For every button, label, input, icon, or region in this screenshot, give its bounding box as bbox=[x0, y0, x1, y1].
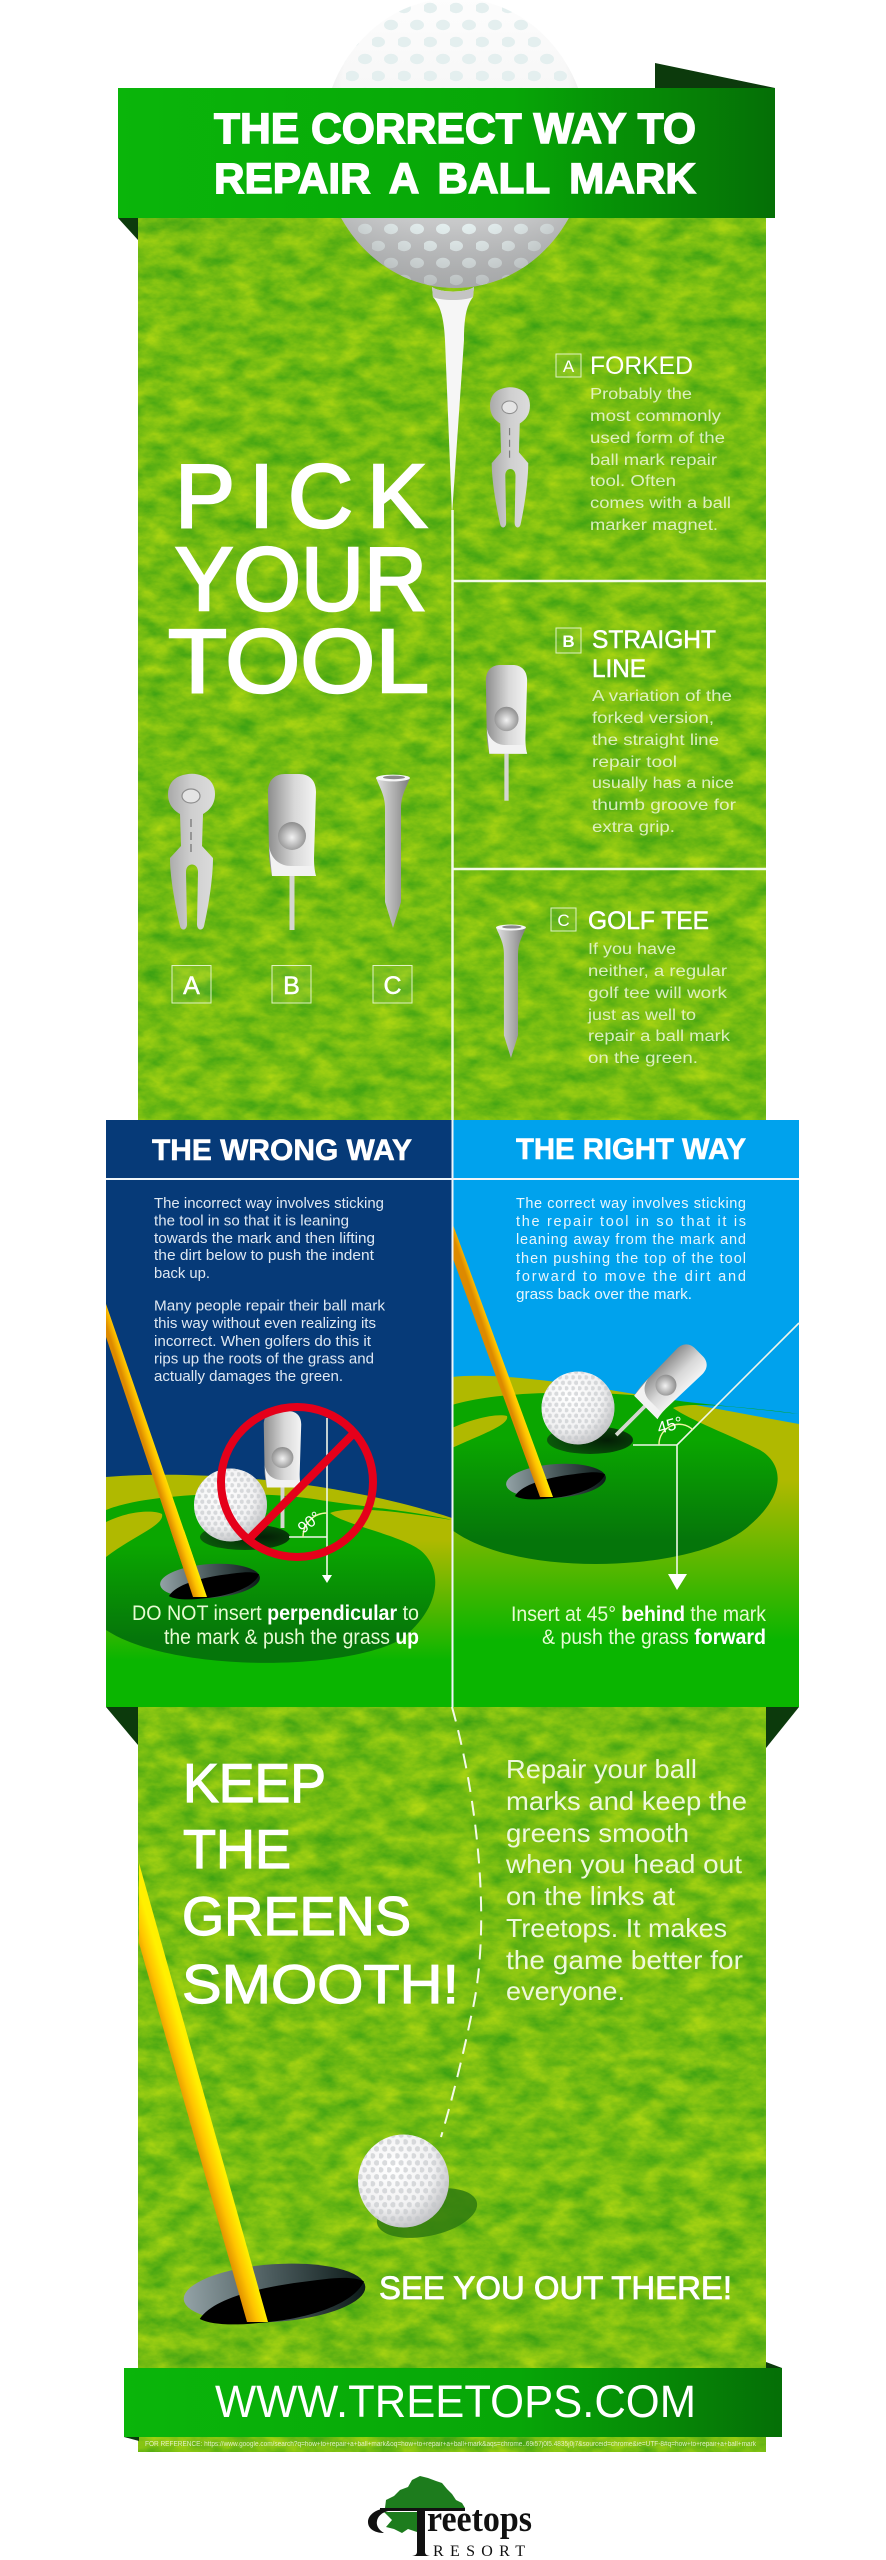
title banner: REPAIR A BALL MARK bbox=[214, 155, 696, 203]
title banner bbox=[118, 63, 775, 240]
label A: A bbox=[183, 972, 200, 1000]
intro text: forward to move the dirt and bbox=[516, 1269, 746, 1285]
logo: Treetops Resort bbox=[368, 2476, 532, 2560]
repair tool at 45 degrees bbox=[603, 1340, 712, 1448]
label B: B bbox=[283, 972, 300, 1000]
panel: forked tool: tool. Often bbox=[590, 473, 676, 490]
panel: straight line tool: extra grip. bbox=[592, 819, 675, 836]
heading: the right way: THE RIGHT WAY bbox=[516, 1133, 746, 1166]
intro text: leaning away from the mark and bbox=[516, 1232, 746, 1248]
label C: C bbox=[383, 972, 402, 1000]
closing text: Repair your ball bbox=[506, 1754, 697, 1784]
panel: golf tee tool: neither, a regular bbox=[588, 963, 727, 980]
panel: straight line tool: repair tool bbox=[592, 754, 677, 771]
panel dividers bbox=[106, 1120, 799, 1707]
heading: pick your tool: YOUR bbox=[175, 530, 427, 630]
heading: the wrong way: THE WRONG WAY bbox=[152, 1134, 412, 1167]
tool C: golf tee bbox=[376, 775, 410, 928]
tool A: forked bbox=[168, 774, 215, 930]
panel: straight line tool: forked version, bbox=[592, 710, 714, 727]
panel: the right way bbox=[452, 1120, 799, 1707]
45 degree lines bbox=[633, 1323, 799, 1576]
heading: keep the greens smooth: GREENS bbox=[182, 1885, 411, 1947]
ball shadow bbox=[200, 1524, 290, 1550]
hole bbox=[182, 2258, 367, 2328]
intro text: The correct way involves sticking bbox=[516, 1196, 746, 1212]
ball shadow bbox=[372, 2180, 482, 2246]
45 degree label bbox=[655, 1413, 693, 1445]
panel folds bbox=[106, 1707, 799, 1748]
closing text: Treetops. It makes bbox=[506, 1913, 727, 1943]
closing text: everyone. bbox=[506, 1976, 625, 2006]
prohibition sign bbox=[221, 1407, 373, 1557]
panel: straight line tool: thumb groove for bbox=[592, 797, 736, 814]
caption bbox=[132, 1602, 419, 1649]
icon: golf tee bbox=[496, 925, 526, 1058]
intro text bbox=[154, 1196, 386, 1385]
panel: golf tee tool: repair a ball mark bbox=[588, 1028, 730, 1045]
intro text: Many people repair their ball mark bbox=[154, 1298, 386, 1314]
panel: golf tee tool: If you have bbox=[588, 941, 676, 958]
website banner bbox=[124, 2362, 782, 2441]
section dividers bbox=[452, 510, 766, 1120]
arrow down bbox=[668, 1574, 687, 1590]
intro text: back up. bbox=[154, 1266, 210, 1282]
caption: & push the grass forward bbox=[542, 1626, 766, 1649]
panel: straight line tool bbox=[486, 626, 736, 836]
flag pole bbox=[139, 1863, 268, 2322]
intro text: rips up the roots of the grass and bbox=[154, 1352, 374, 1368]
90 degree measure: 90° bbox=[295, 1509, 325, 1537]
flag pole base bbox=[171, 1530, 207, 1597]
intro text: grass back over the mark. bbox=[516, 1287, 692, 1303]
panel: forked tool bbox=[490, 352, 731, 534]
45 degree label: 45° bbox=[655, 1413, 685, 1438]
panel: forked tool: Probably the bbox=[590, 386, 692, 403]
heading: keep the greens smooth: KEEP bbox=[183, 1752, 326, 1814]
panel: forked tool: ball mark repair bbox=[590, 452, 717, 469]
panel: forked tool: marker magnet. bbox=[590, 517, 718, 534]
panel: golf tee tool: GOLF TEE bbox=[588, 907, 709, 935]
see you out there: SEE YOU OUT THERE! bbox=[379, 2270, 732, 2306]
panel: golf tee tool: golf tee will work bbox=[588, 985, 727, 1002]
golf ball on tee bbox=[322, 0, 588, 515]
caption: Insert at 45° behind the mark bbox=[511, 1603, 766, 1626]
intro text bbox=[516, 1196, 746, 1303]
closing text: greens smooth bbox=[506, 1818, 689, 1848]
heading: keep the greens smooth bbox=[182, 1752, 459, 2015]
heading: pick your tool: TOOL bbox=[168, 612, 429, 712]
90 degree measure bbox=[289, 1418, 332, 1583]
green hill scene bbox=[452, 1376, 799, 1707]
panel: golf tee tool: C bbox=[557, 911, 570, 930]
heading: keep the greens smooth: SMOOTH! bbox=[182, 1953, 459, 2015]
heading: keep the greens smooth: THE bbox=[183, 1818, 291, 1880]
intro text: actually damages the green. bbox=[154, 1369, 343, 1385]
heading: pick your tool bbox=[168, 447, 429, 712]
panel: forked tool: most commonly bbox=[590, 408, 721, 425]
logo: Treetops Resort: reetops bbox=[427, 2499, 532, 2540]
caption: the mark & push the grass up bbox=[164, 1626, 419, 1649]
panel: golf tee tool: just as well to bbox=[587, 1007, 696, 1024]
panel: forked tool: FORKED bbox=[590, 352, 693, 380]
website banner: WWW.TREETOPS.COM bbox=[215, 2376, 696, 2427]
caption: DO NOT insert perpendicular to bbox=[132, 1602, 419, 1625]
icon: forked tool bbox=[490, 387, 530, 527]
icon: straight line tool bbox=[486, 665, 527, 801]
label A bbox=[172, 966, 211, 1003]
golf ball bbox=[194, 1468, 267, 1542]
repair tool upright bbox=[264, 1411, 301, 1528]
label C bbox=[373, 966, 412, 1003]
closing text: when you head out bbox=[505, 1849, 743, 1879]
golf ball bbox=[542, 1372, 614, 1444]
intro text: The incorrect way involves sticking bbox=[154, 1196, 384, 1212]
panel: straight line tool: the straight line bbox=[592, 732, 719, 749]
intro text: this way without even realizing its bbox=[154, 1316, 376, 1332]
caption bbox=[511, 1603, 766, 1649]
intro text: the dirt below to push the indent bbox=[154, 1248, 374, 1264]
ball shadow bbox=[547, 1426, 633, 1454]
title banner: THE CORRECT WAY TO bbox=[214, 105, 696, 153]
panel: forked tool: A bbox=[563, 357, 575, 376]
panel: forked tool: comes with a ball bbox=[590, 495, 731, 512]
panel: golf tee tool bbox=[496, 907, 730, 1067]
panel: the wrong way bbox=[106, 1120, 452, 1707]
green hill scene bbox=[106, 1304, 452, 1707]
golf ball bbox=[358, 2134, 449, 2228]
closing text: the game better for bbox=[506, 1945, 743, 1975]
intro text: towards the mark and then lifting bbox=[154, 1231, 375, 1247]
heading: pick your tool: PICK bbox=[175, 447, 427, 547]
closing text: marks and keep the bbox=[506, 1786, 747, 1816]
panel: straight line tool: B bbox=[562, 632, 575, 651]
hole bbox=[505, 1461, 607, 1502]
panel: straight line tool: STRAIGHT bbox=[592, 626, 716, 654]
intro text: the tool in so that it is leaning bbox=[154, 1214, 349, 1230]
panel: golf tee tool: on the green. bbox=[588, 1050, 698, 1067]
intro text: incorrect. When golfers do this it bbox=[154, 1334, 371, 1350]
tool B: straight line bbox=[268, 774, 316, 930]
flag pole bbox=[452, 1222, 553, 1497]
hole bbox=[159, 1561, 261, 1602]
reference url: FOR REFERENCE: https://www.google.com/search?q=how+to+repair+a+ball+mark&oq=how+to+repair+a+ball+mark&aqs=chrome..69i57j0l5.4835j0j7&sourceid=chrome&ie=UTF-8#q=how+to+repair+a+ball+mark bbox=[145, 2441, 756, 2448]
closing text bbox=[505, 1754, 747, 2006]
panel: forked tool: used form of the bbox=[590, 430, 725, 447]
intro text: then pushing the top of the tool bbox=[516, 1251, 746, 1267]
closing text: on the links at bbox=[506, 1881, 676, 1911]
grass panel background bbox=[138, 200, 766, 2452]
panel: straight line tool: usually has a nice bbox=[592, 775, 734, 792]
logo: Treetops Resort: RESORT bbox=[433, 2543, 525, 2560]
label B bbox=[272, 966, 311, 1003]
icon: tree bbox=[384, 2476, 465, 2533]
panel: straight line tool: A variation of the bbox=[592, 688, 732, 705]
panel: straight line tool: LINE bbox=[592, 655, 646, 683]
dashed ball path bbox=[441, 1707, 481, 2137]
intro text: the repair tool in so that it is bbox=[516, 1214, 746, 1230]
